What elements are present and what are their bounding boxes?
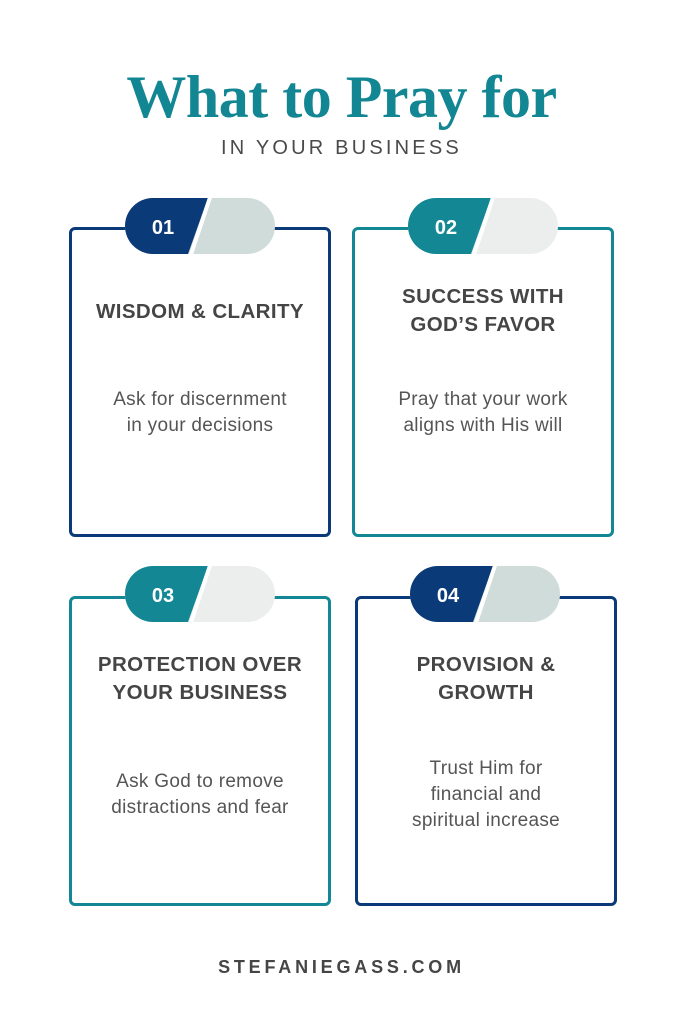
badge 01 xyxy=(125,198,275,254)
text 1: in your decisions xyxy=(127,415,273,436)
heading 3 xyxy=(98,653,302,704)
badge 04 xyxy=(410,566,560,622)
badge 03: 03 xyxy=(152,585,174,607)
badge 04: 04 xyxy=(437,585,460,607)
panel: card 4 xyxy=(355,596,617,906)
heading 4: GROWTH xyxy=(438,681,534,704)
text 1: Ask for discernment xyxy=(113,389,287,410)
title: What to Pray for xyxy=(126,64,557,130)
badge 02: 02 xyxy=(435,217,457,239)
text 2 xyxy=(398,389,568,436)
text 2: Pray that your work xyxy=(398,389,568,410)
text 4: financial and xyxy=(431,784,541,805)
badge 03 xyxy=(125,566,275,622)
heading 3: PROTECTION OVER xyxy=(98,653,302,676)
subtitle: IN YOUR BUSINESS xyxy=(221,137,462,159)
heading 4 xyxy=(417,653,555,704)
text 4: Trust Him for xyxy=(430,758,542,779)
text 4: spiritual increase xyxy=(412,810,560,831)
text 1 xyxy=(113,389,287,436)
heading 1: WISDOM & CLARITY xyxy=(96,300,304,323)
badge 02 xyxy=(408,198,558,254)
text 3 xyxy=(111,771,289,818)
text 4 xyxy=(412,758,560,831)
badge 01: 01 xyxy=(152,217,174,239)
heading 2: SUCCESS WITH xyxy=(402,285,564,308)
panel: card 2 xyxy=(352,227,614,537)
heading 4: PROVISION & xyxy=(417,653,555,676)
heading 2: GOD’S FAVOR xyxy=(410,313,556,336)
text 3: distractions and fear xyxy=(111,797,289,818)
text 3: Ask God to remove xyxy=(116,771,284,792)
heading 2 xyxy=(402,285,564,336)
footer: STEFANIEGASS.COM xyxy=(218,957,465,977)
text 2: aligns with His will xyxy=(403,415,563,436)
panel: card 3 xyxy=(69,596,331,906)
panel: card 1 xyxy=(69,227,331,537)
heading 3: YOUR BUSINESS xyxy=(113,681,287,704)
